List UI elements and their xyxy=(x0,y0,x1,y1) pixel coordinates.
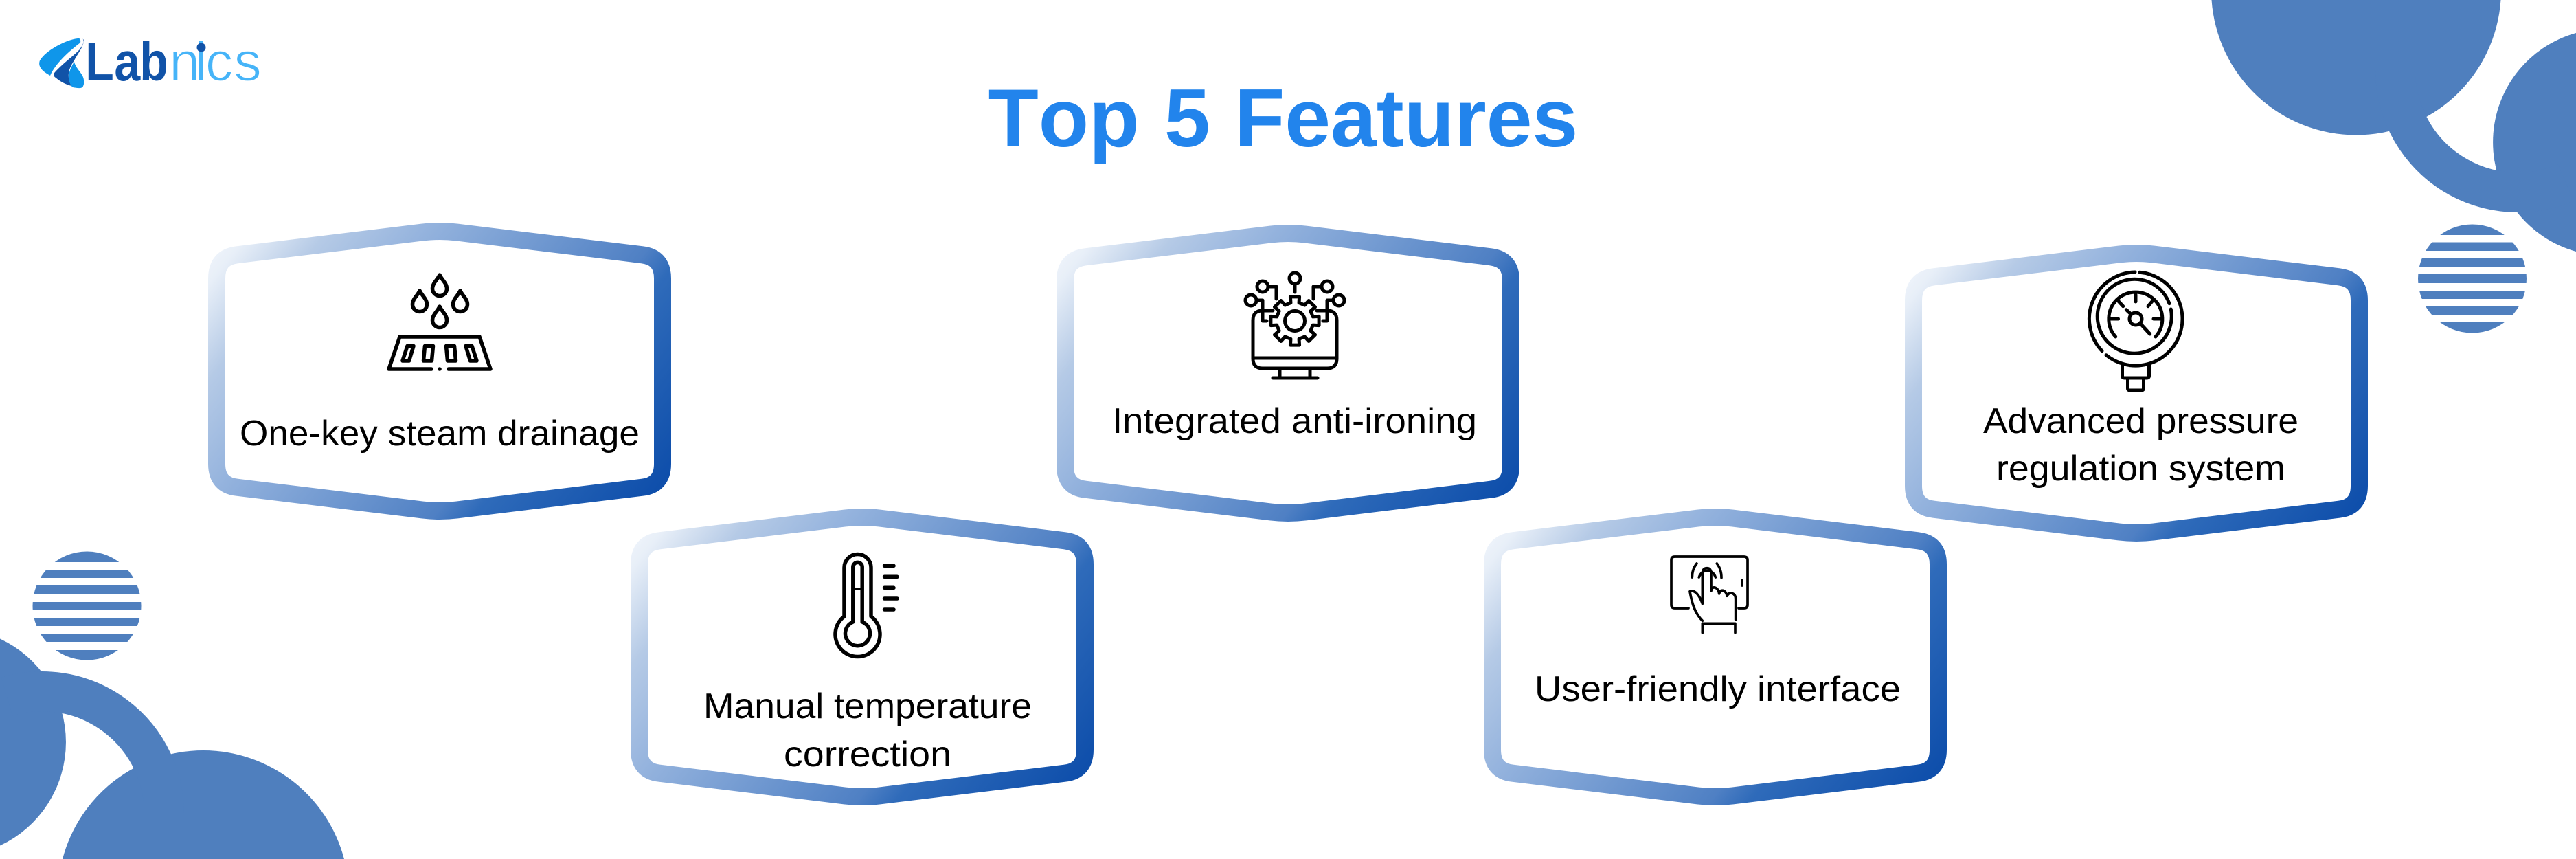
logo mark xyxy=(39,38,84,88)
panel: One-key steam drainage xyxy=(217,231,662,511)
logo wordmark xyxy=(85,31,262,92)
label: Integrated anti-ironing xyxy=(1112,401,1477,441)
title: Top xyxy=(988,72,1139,164)
card frame xyxy=(1065,234,1511,513)
logo wordmark: Lab xyxy=(85,31,168,92)
decoration: bottom-left circles xyxy=(0,639,344,859)
decoration: top-right circles xyxy=(2212,0,2576,252)
decoration: bottom-left striped circle xyxy=(30,551,145,660)
label: correction xyxy=(784,735,951,774)
logo: Labnics xyxy=(39,31,262,92)
logo wordmark: nics xyxy=(169,31,262,92)
label: One-key steam drainage xyxy=(240,414,640,454)
icon: thermometer xyxy=(835,554,897,657)
card frame xyxy=(217,231,662,511)
panel: User-friendly interface xyxy=(1492,517,1939,797)
card frame xyxy=(1492,517,1939,797)
label: Manual temperature xyxy=(703,687,1032,726)
title: 5 xyxy=(1164,72,1210,164)
title: Features xyxy=(1234,72,1578,164)
label xyxy=(703,687,1032,774)
card frame xyxy=(1914,253,2359,533)
label xyxy=(1983,401,2298,489)
icon: hand touching tablet xyxy=(1671,557,1748,633)
icon: monitor with gear and circuits xyxy=(1245,273,1344,378)
icon: pressure gauge xyxy=(2089,272,2182,390)
panel: Advanced pressure regulation system xyxy=(1914,253,2359,533)
label: User-friendly interface xyxy=(1535,669,1901,709)
icon: water drops over drain tray xyxy=(389,275,490,371)
card frame xyxy=(639,517,1085,797)
decoration: top-right striped circle xyxy=(2415,224,2530,333)
panel: Manual temperature correction xyxy=(639,517,1085,797)
panel: Integrated anti-ironing xyxy=(1065,234,1511,513)
label: regulation system xyxy=(1996,449,2285,489)
label: Advanced pressure xyxy=(1983,401,2298,441)
